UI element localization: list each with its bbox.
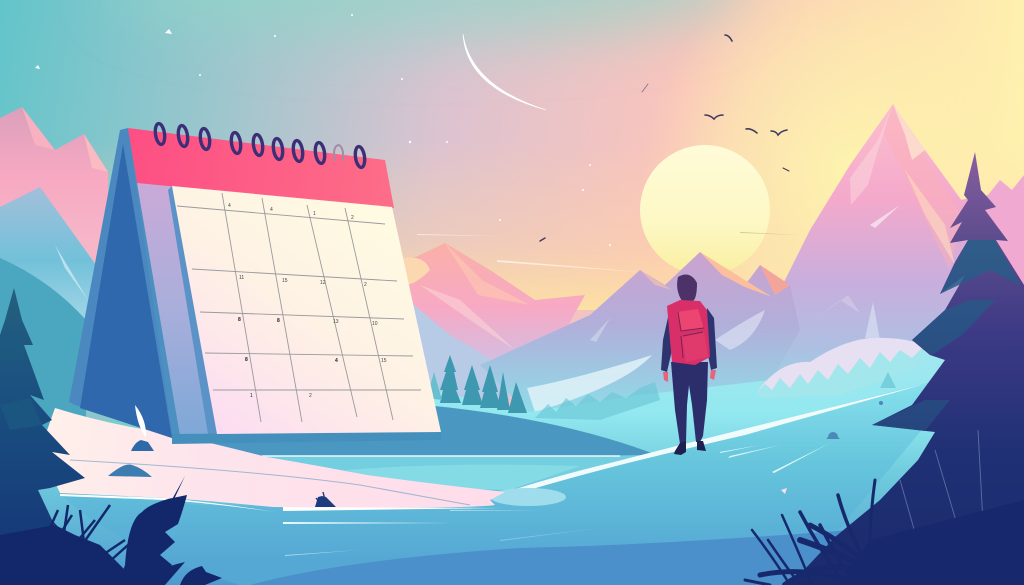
sun xyxy=(640,145,770,275)
calendar numbers: 1 xyxy=(250,393,253,399)
calendar stand: outer blue side xyxy=(69,128,180,438)
calendar xyxy=(69,123,441,444)
backpack xyxy=(667,300,710,365)
calendar numbers: 1 xyxy=(313,211,316,217)
sky background xyxy=(0,0,1024,420)
teal pine cluster xyxy=(427,355,527,413)
lower valley field xyxy=(0,345,1024,585)
sunlit slope with path xyxy=(60,382,930,585)
mountains: big right peak xyxy=(690,104,1024,410)
hiker with red backpack xyxy=(661,275,717,455)
calendar ground hill xyxy=(160,405,657,460)
calendar numbers: 10 xyxy=(372,321,378,327)
calendar rear pages xyxy=(137,183,217,434)
birds xyxy=(540,35,789,241)
snowy hill with pale treeline xyxy=(757,338,925,398)
small reed by calendar xyxy=(131,405,154,451)
left foreground foliage xyxy=(0,476,222,585)
calendar numbers: 11 xyxy=(239,275,244,281)
right pine needle lines xyxy=(900,430,1024,585)
calendar numbers: 12 xyxy=(320,280,326,286)
snow bank xyxy=(40,408,505,524)
calendar numbers: 8 xyxy=(245,357,248,363)
mountains: middle range behind hiker xyxy=(480,252,800,415)
calendar numbers: 4 xyxy=(335,358,338,364)
calendar page xyxy=(172,186,441,434)
calendar numbers: 2 xyxy=(351,215,354,221)
calendar numbers: 15 xyxy=(381,358,387,364)
mountains: centre pink peak xyxy=(402,243,585,400)
left pine tree xyxy=(0,288,85,585)
calendar binding rings xyxy=(154,123,366,168)
calendar numbers: 13 xyxy=(333,319,339,325)
sky specks and streaks xyxy=(35,14,800,272)
hiker hands xyxy=(663,370,716,382)
lake water xyxy=(262,456,640,490)
calendar numbers: 8 xyxy=(238,317,241,323)
calendar numbers: 2 xyxy=(309,393,312,399)
calendar numbers xyxy=(228,203,387,399)
right foreground grass xyxy=(745,480,1024,585)
calendar header xyxy=(128,128,394,208)
crescent moon xyxy=(463,34,546,110)
right pine teal boughs xyxy=(872,240,1020,431)
right pine tree xyxy=(790,152,1024,585)
calendar numbers: 8 xyxy=(277,318,280,324)
hiker boots xyxy=(674,441,706,455)
hiker legs xyxy=(671,362,708,444)
calendar numbers: 2 xyxy=(364,282,367,288)
calendar numbers: 15 xyxy=(282,278,288,284)
calendar numbers: 4 xyxy=(270,207,273,213)
hiker head xyxy=(677,275,697,301)
mountains: left range xyxy=(0,107,108,440)
calendar stand: dark inner back xyxy=(80,144,172,438)
distant treeline xyxy=(535,382,660,420)
calendar numbers: 4 xyxy=(228,203,231,209)
hiker arms xyxy=(661,308,717,372)
calendar grid xyxy=(177,193,421,422)
calendar base xyxy=(172,432,441,444)
